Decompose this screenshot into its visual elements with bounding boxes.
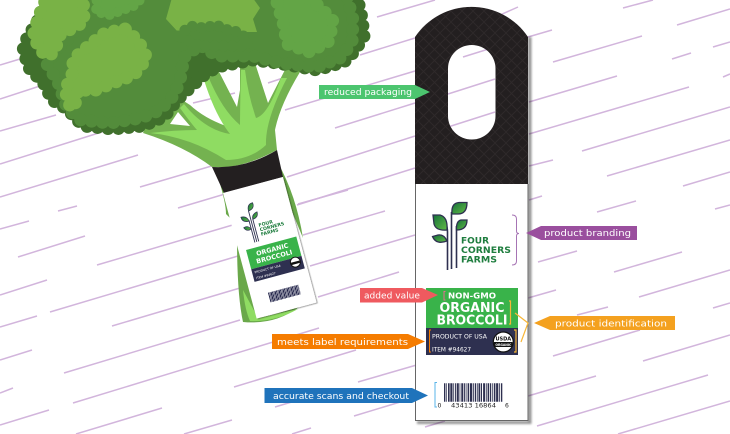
- label: added value: added value: [364, 291, 420, 301]
- mini product panel: [246, 237, 305, 282]
- logo: Four Corners Farms: FOUR: [461, 236, 489, 246]
- icon: USDA organic seal: ORGANIC: [495, 343, 512, 347]
- mini product panel: BROCCOLI: [255, 248, 293, 266]
- barcode: [438, 392, 509, 410]
- black paper band: [212, 150, 283, 193]
- barcode: 0: [438, 402, 442, 410]
- label: product identification: [534, 316, 675, 330]
- icon: USDA organic seal: USDA: [495, 336, 511, 342]
- broccoli illustration: [23, 0, 364, 322]
- mini logo: CORNERS: [259, 221, 286, 233]
- label: product identification: product identification: [555, 319, 667, 329]
- label: meets label requirements: [272, 334, 425, 349]
- bracket: added value: [444, 292, 446, 300]
- label: product branding: [526, 226, 637, 240]
- floret: top left: [33, 0, 84, 56]
- barcode: 43413 16864: [451, 404, 496, 410]
- mini product panel: ORGANIC: [255, 241, 290, 258]
- floret: centre: [65, 29, 147, 108]
- bracket: barcode: [435, 382, 437, 407]
- label: added value: [360, 288, 438, 302]
- tag body: [415, 184, 528, 421]
- hang tag: [415, 7, 532, 424]
- tag shadow: [417, 37, 532, 424]
- mini product panel: PRODUCT OF USA: [254, 263, 282, 274]
- floret: top right: [274, 0, 333, 52]
- mini product panel: ITEM #94627: [256, 271, 276, 280]
- label: product branding: product branding: [544, 229, 631, 239]
- product panel: ITEM #94627: [432, 346, 471, 353]
- broccoli head: [23, 0, 364, 129]
- label: accurate scans and checkout: [264, 388, 428, 403]
- icon: USDA organic seal: [493, 332, 513, 352]
- broccoli lower stem: [218, 163, 303, 322]
- floret: top middle: [96, 0, 146, 15]
- label: meets label requirements: meets label requirements: [277, 338, 409, 348]
- logo: Four Corners Farms: FARMS: [461, 256, 497, 266]
- product panel: [426, 288, 518, 355]
- label: reduced packaging: [319, 85, 430, 99]
- product panel: BROCCOLI: [436, 313, 508, 328]
- logo: Four Corners Farms: CORNERS: [461, 246, 511, 256]
- bracket: product branding: [512, 215, 519, 265]
- label: reduced packaging: reduced packaging: [324, 88, 412, 98]
- product panel: PRODUCT OF USA: [432, 334, 488, 340]
- broccoli upper stem and branches: [143, 60, 303, 167]
- logo: Four Corners Farms: [432, 202, 511, 270]
- mini logo: FARMS: [260, 227, 280, 238]
- product panel: NON-GMO: [448, 292, 496, 301]
- bracket: label requirements: [430, 330, 431, 352]
- hang tag on broccoli: [223, 177, 317, 319]
- tag white panel border: [416, 184, 528, 420]
- mini logo: FOUR: [258, 219, 274, 229]
- mini logo: [238, 196, 287, 244]
- mini barcode: [269, 289, 300, 298]
- black die-cut top with hole: [415, 7, 528, 184]
- barcode: 6: [505, 402, 509, 410]
- product panel: ORGANIC: [440, 301, 504, 316]
- floret: top centre: [166, 0, 260, 32]
- bracket: product identification: [509, 301, 528, 352]
- label: accurate scans and checkout: accurate scans and checkout: [273, 392, 410, 402]
